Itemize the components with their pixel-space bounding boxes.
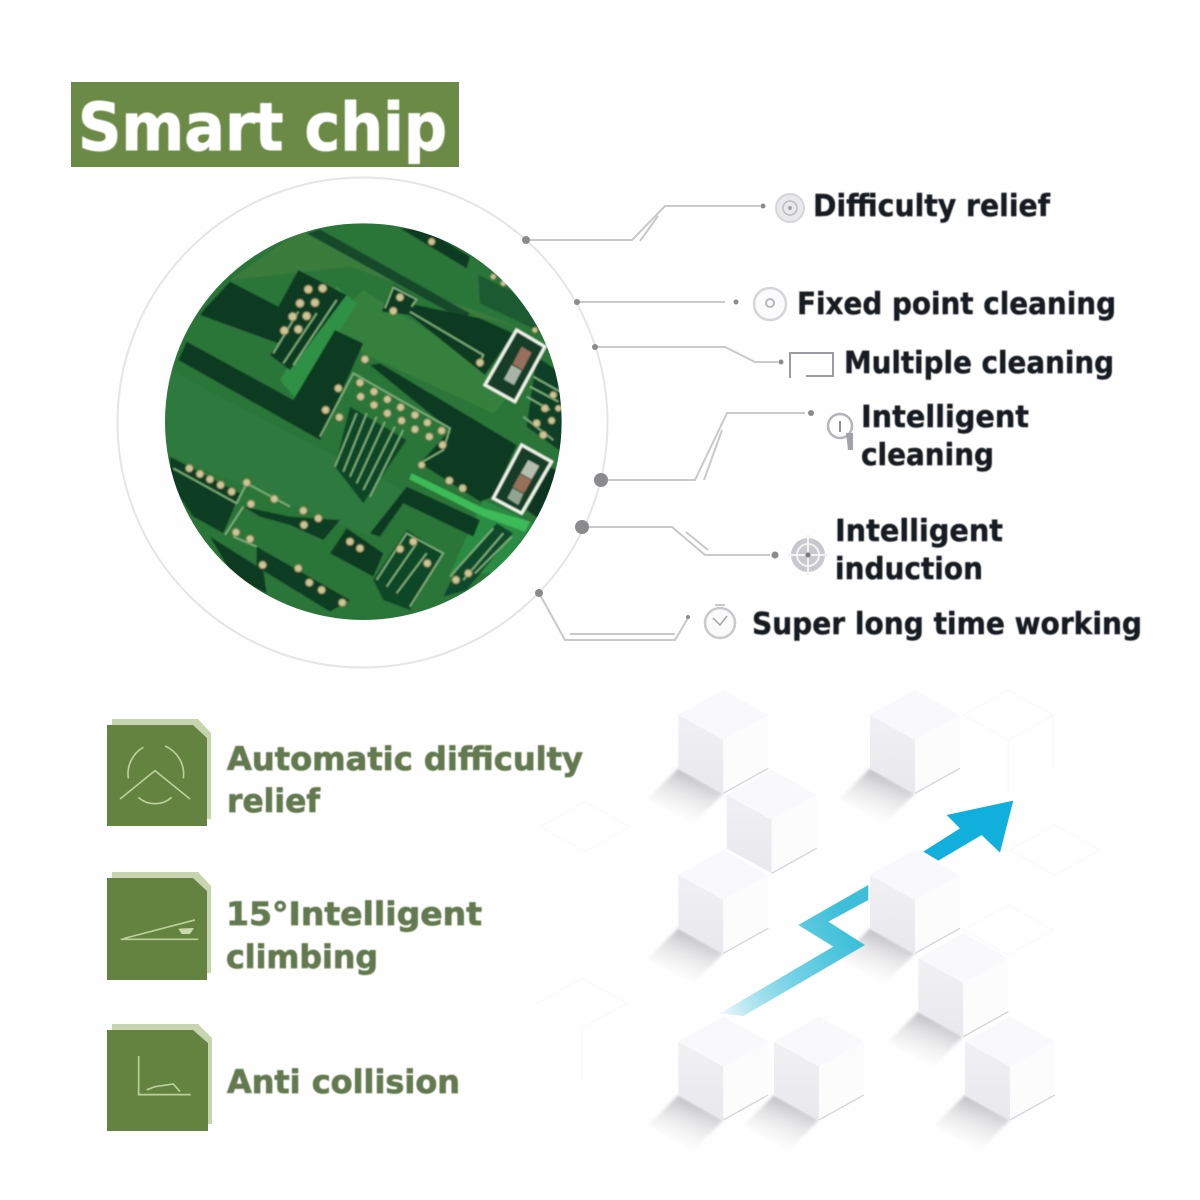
label: Intelligent cleaning: Intelligent: [861, 400, 1029, 435]
icon: multiple cleaning frame: [790, 353, 833, 378]
outer ring around the chip: [118, 178, 608, 668]
icon: touch info: [828, 414, 853, 450]
feature text: Automatic difficulty relief: [227, 740, 583, 820]
label: Difficulty relief: Difficulty relief: [813, 189, 1051, 224]
feature tile icon: 15 degree climbing: [107, 872, 211, 980]
label: Intelligent cleaning: [861, 400, 1029, 473]
feature tile icon: anti collision: [107, 1024, 212, 1131]
front cubes: [678, 850, 1055, 1120]
label: Intelligent induction: induction: [835, 552, 983, 587]
feature text: 15° Intelligent climbing: 15°Intelligent: [226, 895, 482, 933]
arrow head: [923, 801, 1013, 861]
isometric cubes with rising arrow: [537, 690, 1100, 1150]
feature text: Automatic difficulty relief: Automatic difficulty: [227, 740, 583, 778]
label: Multiple cleaning: Multiple cleaning: [844, 346, 1114, 381]
icon: timer: [705, 605, 735, 638]
connector: Intelligent cleaning: [594, 410, 814, 487]
connector: Intelligent induction: [575, 520, 778, 558]
faint ghost cubes: [537, 690, 1100, 1082]
feature text: 15° Intelligent climbing: climbing: [226, 938, 378, 976]
connector: Difficulty relief: [522, 204, 766, 244]
title: Smart chip: Smart chip: [78, 89, 447, 166]
icon: difficulty relief target: [776, 194, 804, 222]
feature text: Automatic difficulty relief: relief: [227, 782, 321, 820]
connector: Fixed point cleaning: [574, 299, 738, 305]
circuit board photo circle: [165, 223, 562, 620]
icon: induction radar: [788, 535, 828, 575]
label: Intelligent induction: [835, 514, 1003, 587]
connector: Multiple cleaning: [592, 344, 784, 364]
cube shadows: [648, 768, 1010, 1150]
label: Intelligent cleaning: cleaning: [861, 438, 994, 473]
label: Fixed point cleaning: Fixed point cleaning: [797, 287, 1116, 322]
feature tile icon: automatic difficulty relief: [107, 719, 211, 826]
label: Intelligent induction: Intelligent: [835, 514, 1003, 549]
back cubes: [678, 690, 960, 953]
label: Super long time working: Super long time working: [752, 607, 1142, 642]
icon: fixed point pin: [754, 288, 786, 320]
feature text: 15° Intelligent climbing: [226, 895, 482, 976]
arrow tail: [720, 885, 868, 1016]
feature text: Anti collision: Anti collision: [227, 1063, 460, 1101]
connector: Super long time working: [535, 589, 690, 640]
